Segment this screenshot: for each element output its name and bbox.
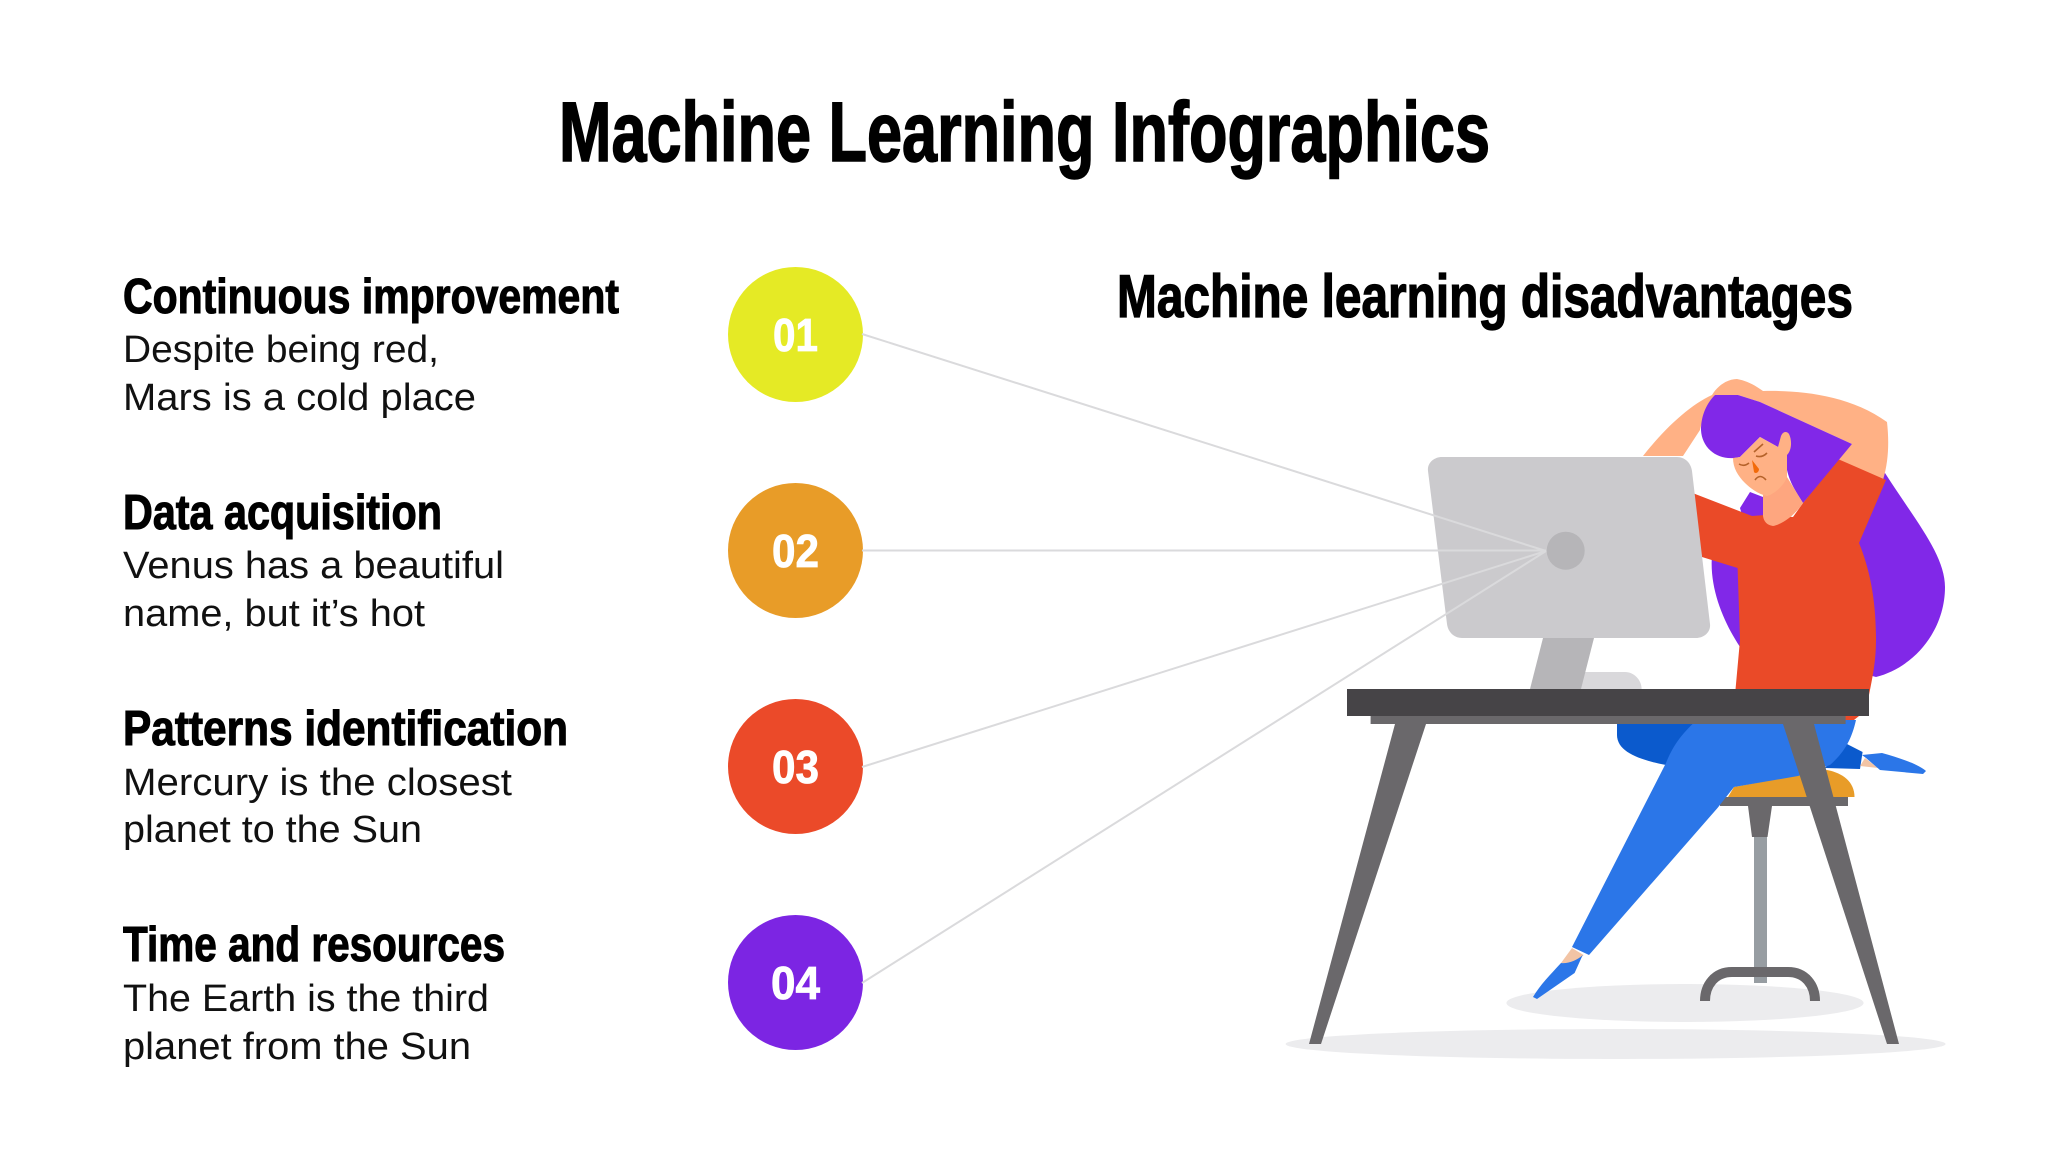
badge 03: 03 [772, 741, 819, 793]
item 3 text [123, 702, 568, 851]
legs and shoes [1533, 716, 1926, 999]
title: Machine Learning Infographics [559, 85, 1490, 179]
item 3 text: planet to the Sun [123, 809, 422, 851]
floor shadows [1286, 984, 1946, 1059]
desk [1309, 689, 1899, 1044]
item 3 text: Patterns identification [123, 702, 568, 756]
item 4 text: The Earth is the third [123, 978, 489, 1020]
monitor [1428, 457, 1710, 689]
heading: machine learning disadvantages: Machine learning disadvantages [1117, 263, 1853, 330]
item 1 text: Mars is a cold place [123, 377, 476, 419]
raised arms [1643, 379, 1888, 480]
item 2 text: Venus has a beautiful [123, 545, 504, 587]
item 2 text: Data acquisition [123, 486, 442, 540]
badge 02: 02 [772, 525, 819, 577]
item 4 text: Time and resources [123, 918, 505, 972]
front hair [1701, 395, 1852, 503]
badge 02 [728, 483, 863, 618]
badge 01 [728, 267, 863, 402]
item 3 text: Mercury is the closest [123, 762, 512, 804]
item 2 text [123, 486, 504, 635]
shirt [1690, 459, 1886, 695]
illustration: woman at desk [1286, 379, 1946, 1059]
item 1 text: Despite being red, [123, 329, 439, 371]
item 4 text: planet from the Sun [123, 1026, 471, 1068]
item 2 text: name, but it’s hot [123, 593, 425, 635]
badge 03 [728, 699, 863, 834]
item 4 text [123, 918, 505, 1068]
badge 01: 01 [773, 309, 818, 361]
face [1733, 432, 1791, 496]
item 1 text [123, 270, 619, 419]
connector lines [862, 334, 1546, 983]
neck [1763, 477, 1803, 526]
stool [1705, 770, 1854, 1001]
badge 04: 04 [771, 957, 820, 1009]
badge 04 [728, 915, 863, 1050]
item 1 text: Continuous improvement [123, 270, 619, 324]
hair back [1712, 473, 1945, 677]
